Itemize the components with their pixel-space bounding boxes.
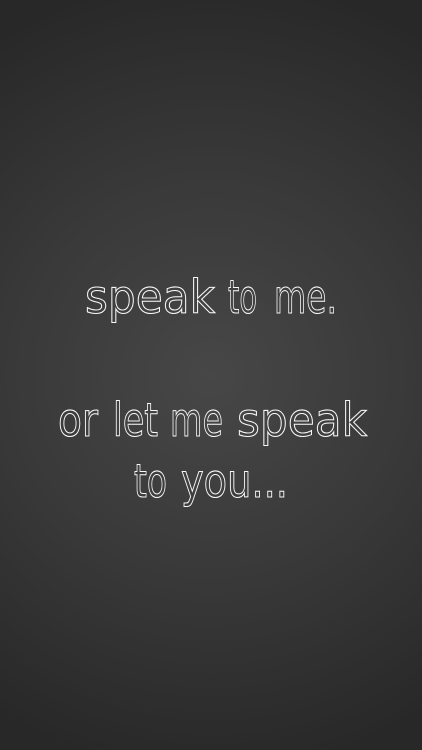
text: to you... xyxy=(134,454,288,508)
text: to you...: to xyxy=(134,454,167,508)
text: or let me speak xyxy=(58,393,367,447)
text: speak to me.: me. xyxy=(274,270,337,324)
text: speak to me. xyxy=(85,270,337,324)
text: or let me speak: me xyxy=(170,393,223,447)
text: speak to me.: speak xyxy=(85,270,215,324)
text: or let me speak: speak xyxy=(237,393,367,447)
text: or let me speak: or xyxy=(58,393,98,447)
text: speak to me.: to xyxy=(228,270,257,324)
text: to you...: you... xyxy=(181,454,288,508)
text: or let me speak: let xyxy=(113,393,158,447)
